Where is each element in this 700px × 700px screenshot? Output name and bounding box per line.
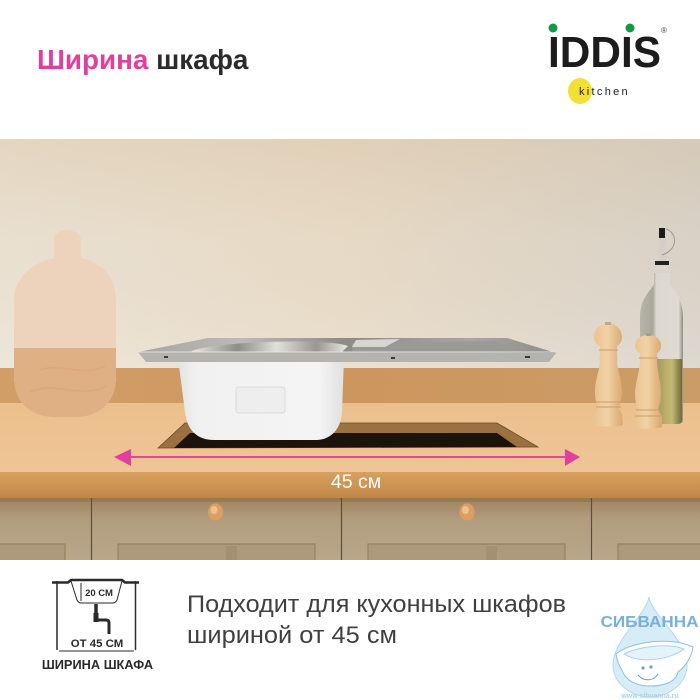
oil bottle bbox=[640, 228, 683, 424]
sink bbox=[138, 338, 556, 440]
logo wordmark: IDDIS bbox=[548, 28, 661, 77]
logo yellow spot bbox=[568, 78, 592, 104]
description text: шириной от 45 см bbox=[187, 622, 397, 649]
description text: Подходит для кухонных шкафов bbox=[187, 591, 566, 618]
icon label: from 45 cm: ОТ 45 СМ bbox=[71, 638, 123, 650]
cutting board bbox=[14, 230, 116, 417]
logo registered mark: ® bbox=[661, 26, 667, 35]
width label: 45 см bbox=[331, 471, 381, 493]
pepper mill small bbox=[634, 333, 662, 428]
sink bowl bbox=[178, 358, 344, 440]
watermark: sibvanna logo bbox=[600, 597, 699, 700]
wall bbox=[0, 139, 700, 369]
icon: cabinet width diagram bbox=[52, 580, 139, 651]
cabinets bbox=[0, 498, 700, 560]
logo kitchen text: kitchen bbox=[579, 86, 630, 98]
cabinet knob right bbox=[460, 504, 474, 520]
caption: cabinet width: ШИРИНА ШКАФА bbox=[42, 657, 153, 672]
countertop front edge bbox=[0, 472, 700, 499]
photo: kitchen scene bbox=[0, 139, 700, 560]
watermark url: www.sibvanna.ru bbox=[620, 693, 679, 700]
countertop surface bbox=[0, 403, 700, 473]
watermark wordmark: СИБВАННА bbox=[600, 614, 699, 631]
cabinet knob left bbox=[208, 504, 223, 520]
width arrow bbox=[114, 449, 580, 466]
pepper mill large bbox=[594, 322, 623, 426]
cutout in countertop bbox=[158, 423, 538, 448]
logo: iddis kitchen bbox=[548, 24, 667, 104]
logo green dots bbox=[548, 24, 634, 32]
icon label: 20 cm: 20 СМ bbox=[85, 588, 113, 599]
wooden backsplash bbox=[0, 368, 700, 404]
title: Ширина шкафа bbox=[37, 44, 249, 75]
sink rim bbox=[138, 338, 556, 362]
